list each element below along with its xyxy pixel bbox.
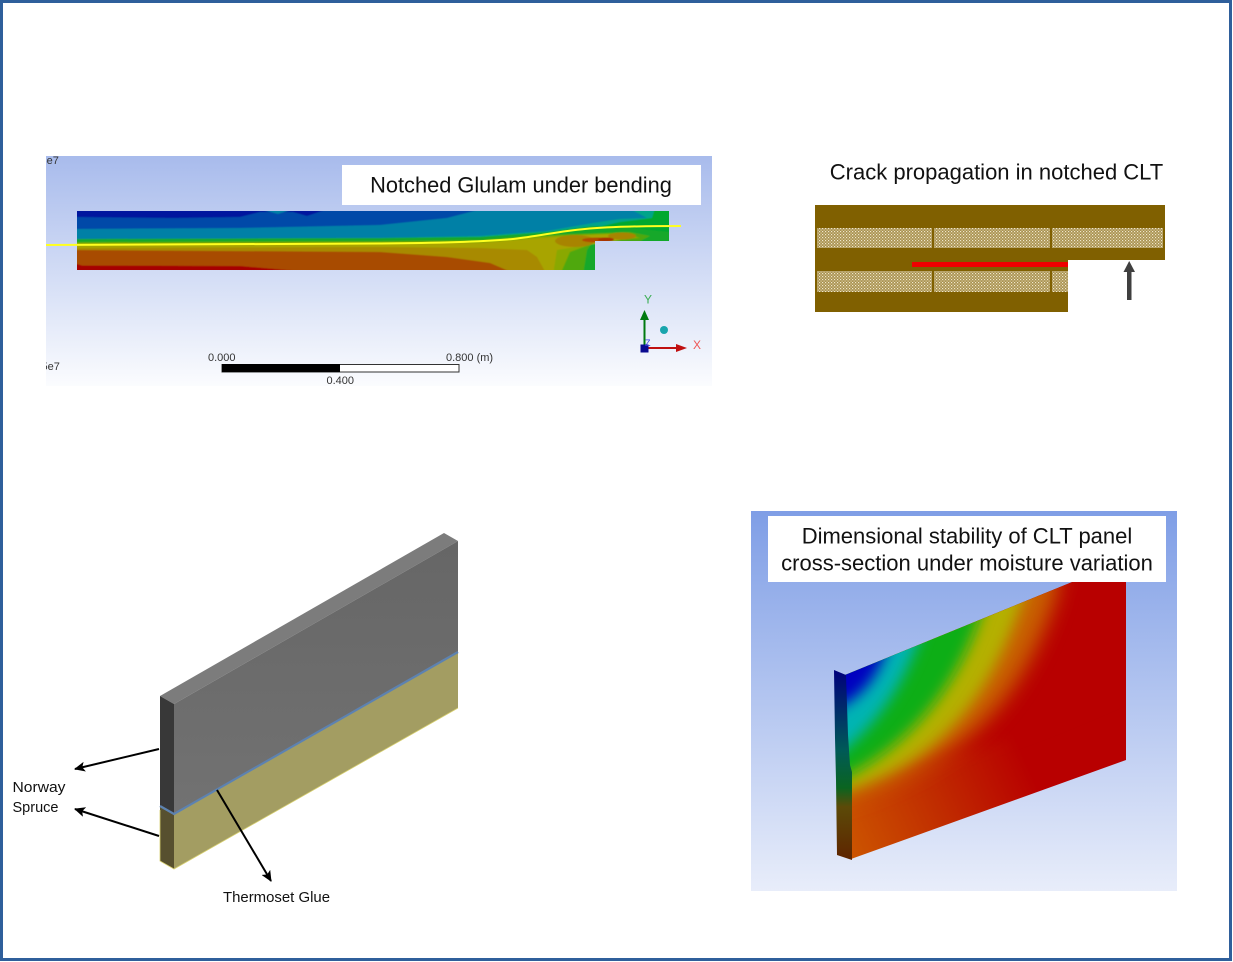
lower lamella front face — [174, 653, 458, 869]
scale bar: 0.800 (m) — [446, 352, 493, 364]
crack, red line — [912, 262, 1068, 267]
axis triad: X — [693, 338, 701, 352]
axis triad — [640, 292, 701, 352]
arrow to glue — [217, 790, 271, 881]
scale bar — [208, 352, 493, 387]
axis triad: Z — [645, 338, 651, 348]
scale bar: 0.400 — [326, 375, 354, 387]
heading box: notched glulam: Notched Glulam under bending — [370, 172, 672, 198]
lower lamella yellow edge — [160, 708, 458, 869]
label: Thermoset Glue: Thermoset Glue — [223, 890, 330, 906]
colour field on panel face — [845, 582, 1126, 859]
heading box: dimensional stability: Dimensional stability of CLT panel — [802, 524, 1132, 548]
glue line — [160, 652, 458, 814]
heading box: dimensional stability: cross-section under moisture variation — [781, 550, 1153, 576]
panel side edge — [834, 670, 852, 860]
heading box: dimensional stability — [768, 516, 1166, 582]
clipped legend fragment bottom: 5e7 — [42, 361, 60, 373]
label: Norway Spruce: Spruce — [12, 800, 58, 816]
clipped legend fragment top: 3e7 — [40, 155, 59, 167]
cross-layer lamellae, perforated bands — [817, 228, 1163, 292]
yellow deflection line — [46, 226, 681, 245]
arrow to lower spruce — [75, 809, 159, 836]
notched CLT body — [815, 205, 1165, 312]
upper lamella side — [160, 696, 174, 815]
block top face — [160, 533, 458, 704]
heading box: notched glulam — [342, 165, 701, 205]
panel: dimensional stability of CLT — [751, 511, 1177, 891]
moisture simulation background — [751, 511, 1177, 891]
load arrow — [1124, 261, 1135, 300]
upper lamella front face — [174, 541, 458, 815]
beam stress contours — [77, 211, 669, 270]
label: Norway Spruce — [12, 780, 66, 816]
panel: 3D glued block — [12, 533, 458, 906]
arrow to upper spruce — [75, 749, 159, 769]
panel: crack propagation in notched CLT — [815, 160, 1165, 312]
lower lamella side — [160, 807, 174, 869]
scale bar: 0.000 — [208, 352, 236, 364]
axis triad: Y — [644, 292, 652, 306]
label: Norway Spruce: Norway — [12, 780, 66, 796]
glulam simulation background — [46, 156, 712, 386]
panel: notched glulam under bending — [40, 155, 712, 387]
heading: crack propagation: Crack propagation in notched CLT — [830, 160, 1163, 184]
